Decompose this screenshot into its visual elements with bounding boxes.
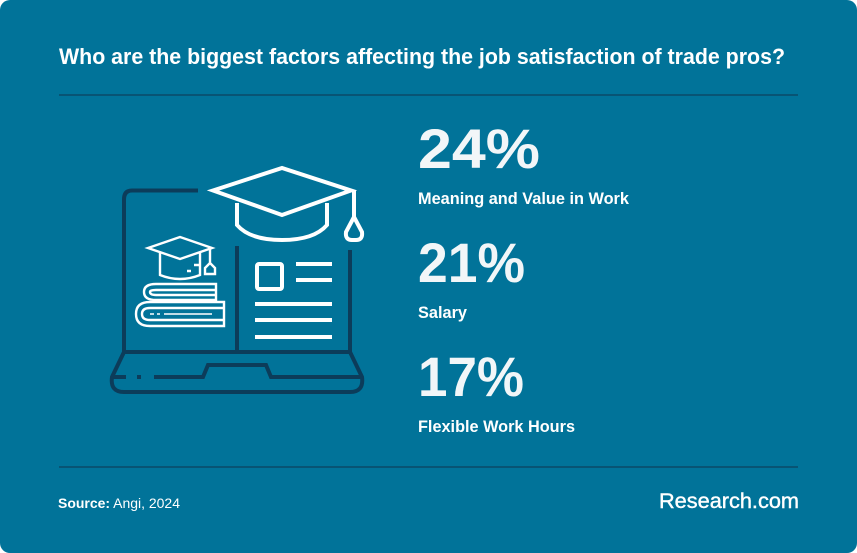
stat: 21% [418, 231, 525, 322]
label: Flexible Work Hours: Flexible Work Hours [418, 418, 575, 436]
label: Meaning and Value in Work: Meaning and Value in Work [418, 190, 630, 208]
icon: laptop [112, 190, 362, 392]
stat: 24% [418, 117, 630, 208]
icon: document lines [255, 264, 332, 337]
source note: Source: Angi, 2024 [58, 495, 180, 511]
number: 21%: 21% [418, 231, 525, 294]
title: Who are the biggest factors affecting the job satisfaction of trade pros? [59, 44, 785, 69]
number: 17%: 17% [418, 345, 524, 408]
logo: Research.com: Research.com [659, 490, 799, 513]
label: Salary: Salary [418, 304, 468, 322]
icon: large graduation cap [213, 168, 362, 240]
icon: laptop with graduation cap and books [112, 168, 362, 392]
icon: small cap and books [136, 237, 224, 326]
stat: 17% [418, 345, 575, 436]
number: 24%: 24% [418, 117, 540, 180]
